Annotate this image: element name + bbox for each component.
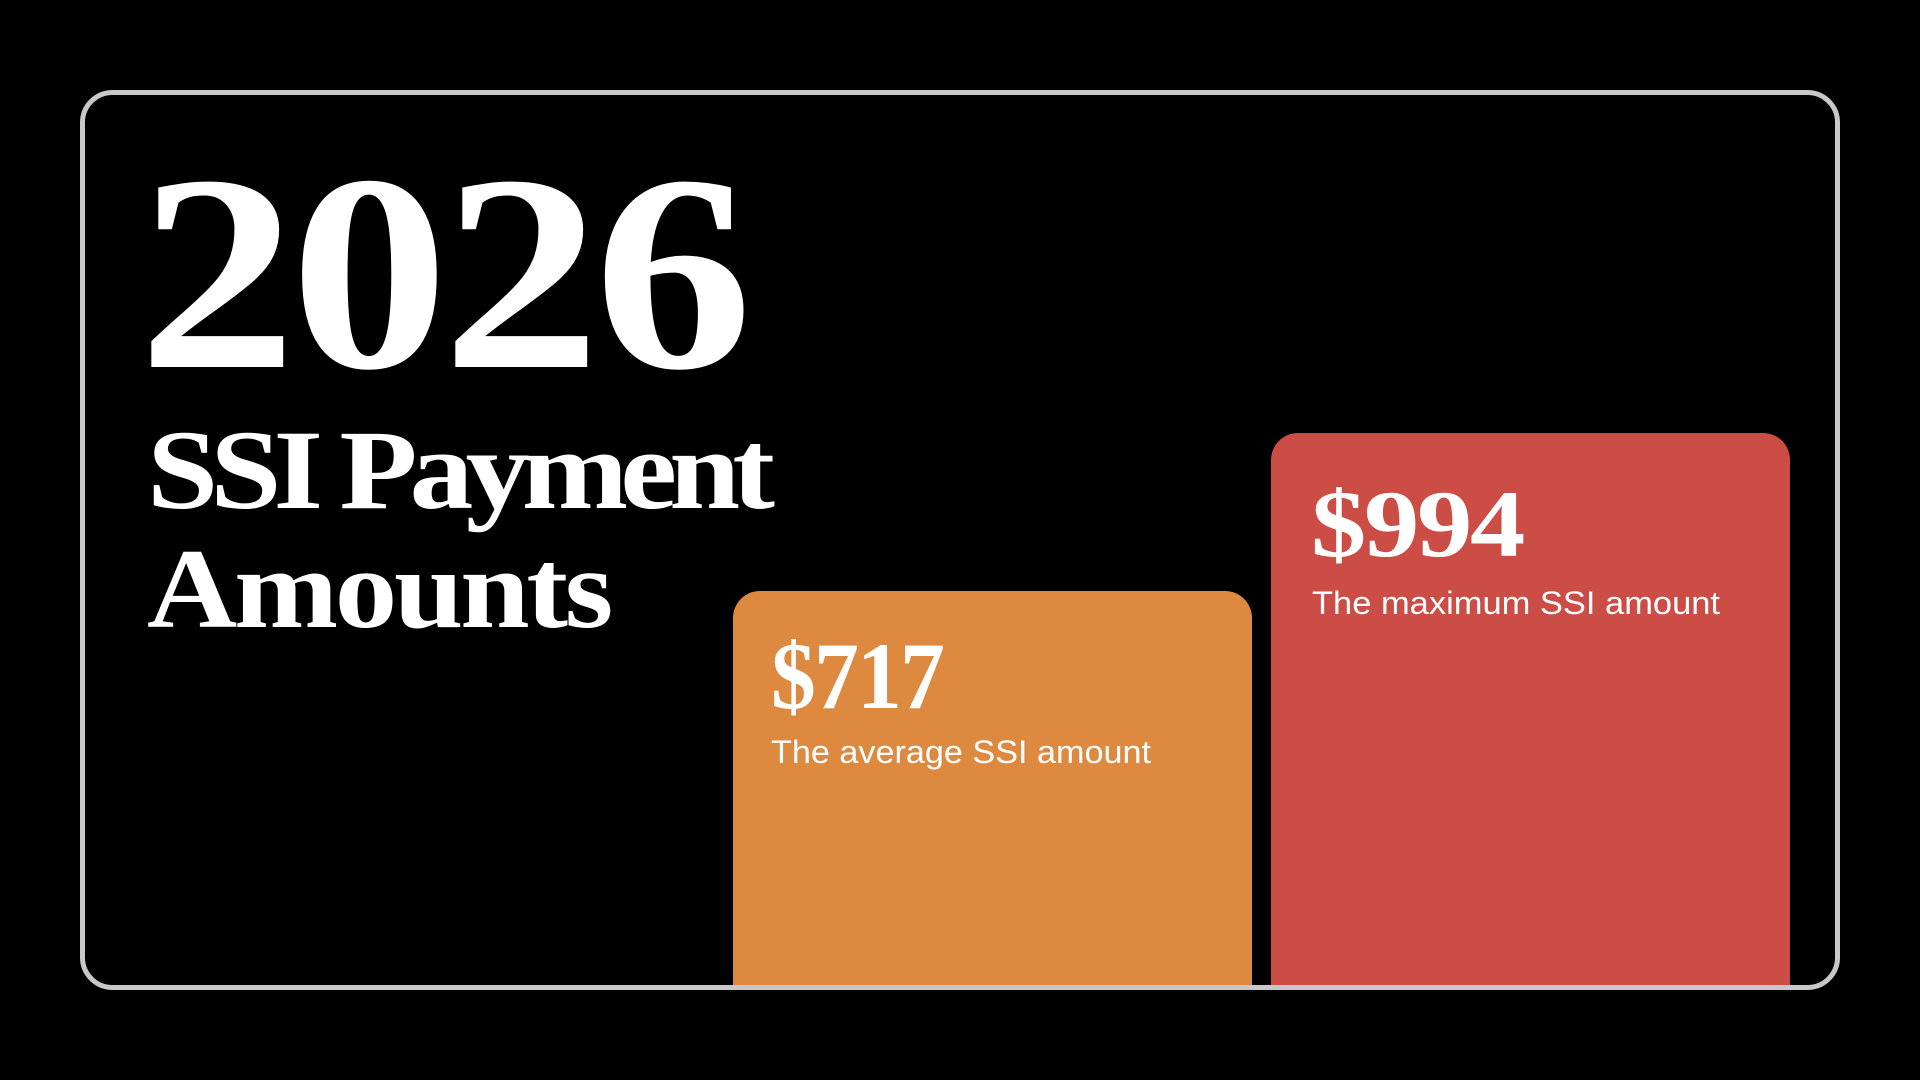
title block <box>138 117 775 652</box>
rounded frame <box>82 92 1838 988</box>
average label: The average SSI amount <box>771 734 1151 770</box>
panel: maximum SSI bar <box>1271 433 1790 985</box>
average value: $717 <box>771 623 943 729</box>
title: year: 2026 <box>138 117 748 428</box>
maximum value: $994 <box>1311 471 1524 577</box>
panel: average SSI bar <box>733 591 1252 985</box>
title: SSI Payment: SSI Payment <box>147 408 775 533</box>
red bar <box>1271 433 1790 985</box>
maximum label: The maximum SSI amount <box>1312 585 1720 621</box>
title: Amounts: Amounts <box>147 527 611 652</box>
orange bar <box>733 591 1252 985</box>
